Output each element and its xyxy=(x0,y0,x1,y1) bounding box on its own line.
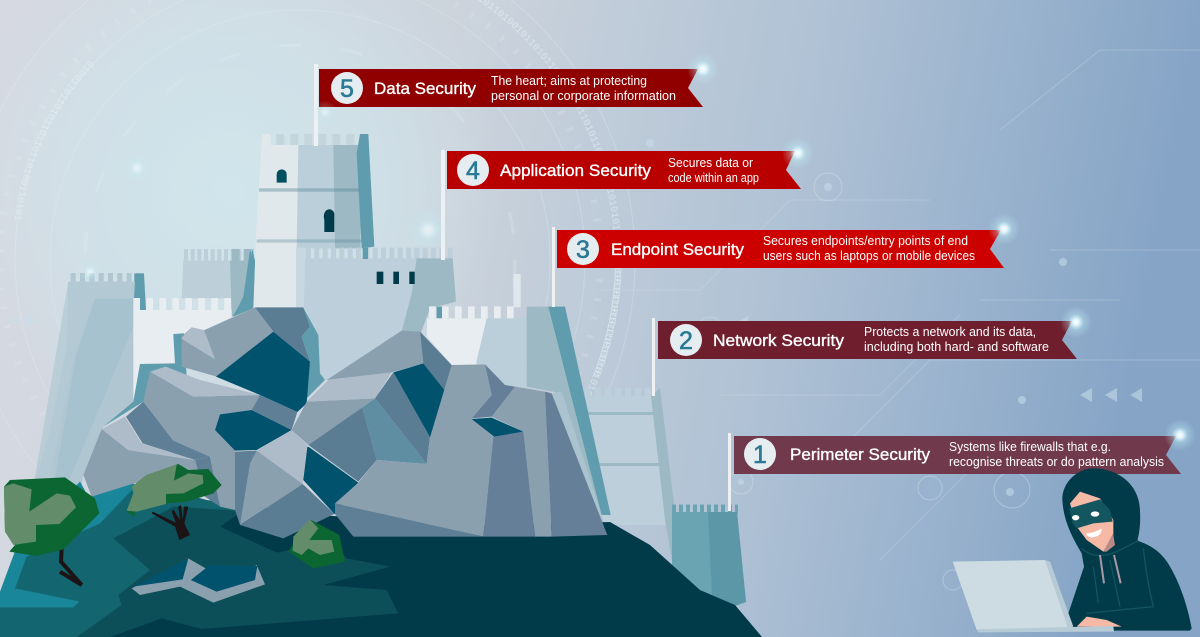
banner 2: Network Security xyxy=(658,321,1077,359)
banner 4: Application Security: Secures data or xyxy=(668,156,753,170)
hoodie xyxy=(1062,468,1192,631)
banner 1: Perimeter Security xyxy=(734,436,1181,474)
banner 5: Data Security: The heart; aims at protecting xyxy=(491,74,647,88)
banner 3: Endpoint Security: Endpoint Security xyxy=(611,240,744,259)
banner 2: Network Security: including both hard- and software xyxy=(864,340,1049,354)
front low tower xyxy=(672,509,746,606)
banner 1: Perimeter Security: Perimeter Security xyxy=(790,445,930,464)
icon: left tree xyxy=(4,477,99,585)
banner 2: Network Security: 2 xyxy=(679,327,693,355)
banner 1: Perimeter Security: 1 xyxy=(753,441,767,469)
banner 2: Network Security: Network Security xyxy=(713,331,845,350)
keep tower and wing xyxy=(232,134,521,380)
banner 3: Endpoint Security: 3 xyxy=(576,236,590,264)
hoodie strings xyxy=(1100,555,1121,583)
tower windows xyxy=(277,169,287,183)
terrain details and trees xyxy=(4,464,345,603)
laptop xyxy=(953,560,1122,632)
hoodie seams xyxy=(1082,541,1153,613)
ground and hill xyxy=(0,482,762,637)
banner 5: Data Security: personal or corporate information xyxy=(491,89,676,103)
flag poles xyxy=(314,64,731,511)
banner 5: Data Security xyxy=(319,69,703,107)
face xyxy=(1070,492,1113,552)
banner 1: Perimeter Security: Systems like firewalls that e.g. xyxy=(949,440,1111,454)
banner 3: Endpoint Security: users such as laptops or mobile devices xyxy=(763,249,975,263)
right back tower xyxy=(585,388,676,560)
rocks xyxy=(83,307,607,538)
banner 4: Application Security: Application Security xyxy=(500,161,651,180)
banner 1: Perimeter Security: recognise threats or do pattern analysis xyxy=(949,455,1164,469)
castle xyxy=(33,134,746,606)
banner 3: Endpoint Security: Secures endpoints/entry points of end xyxy=(763,234,968,248)
mask xyxy=(1069,499,1113,528)
binary code arcs xyxy=(15,0,636,537)
banner 4: Application Security xyxy=(447,151,801,189)
banner 4: Application Security: code within an app xyxy=(668,171,759,185)
hacker at laptop xyxy=(953,468,1192,632)
left tower xyxy=(33,249,255,487)
icon: pool xyxy=(132,558,265,603)
binary code arcs: 010011011010110110110100110101 xyxy=(15,62,94,220)
background halo xyxy=(0,0,620,520)
eyes and grin xyxy=(1072,511,1102,537)
banner 5: Data Security: Data Security xyxy=(374,79,476,98)
banner 5: Data Security: 5 xyxy=(340,75,354,103)
front wall and tower xyxy=(427,307,611,537)
light glows xyxy=(78,53,1196,451)
icon: center tree xyxy=(126,464,222,540)
binary code arcs: 0110101011010101011010 xyxy=(594,268,622,376)
banner 4: Application Security: 4 xyxy=(466,157,480,185)
icon: bush xyxy=(288,519,345,568)
banner 3: Endpoint Security xyxy=(557,230,1004,268)
banner 2: Network Security: Protects a network and its data, xyxy=(864,325,1036,339)
